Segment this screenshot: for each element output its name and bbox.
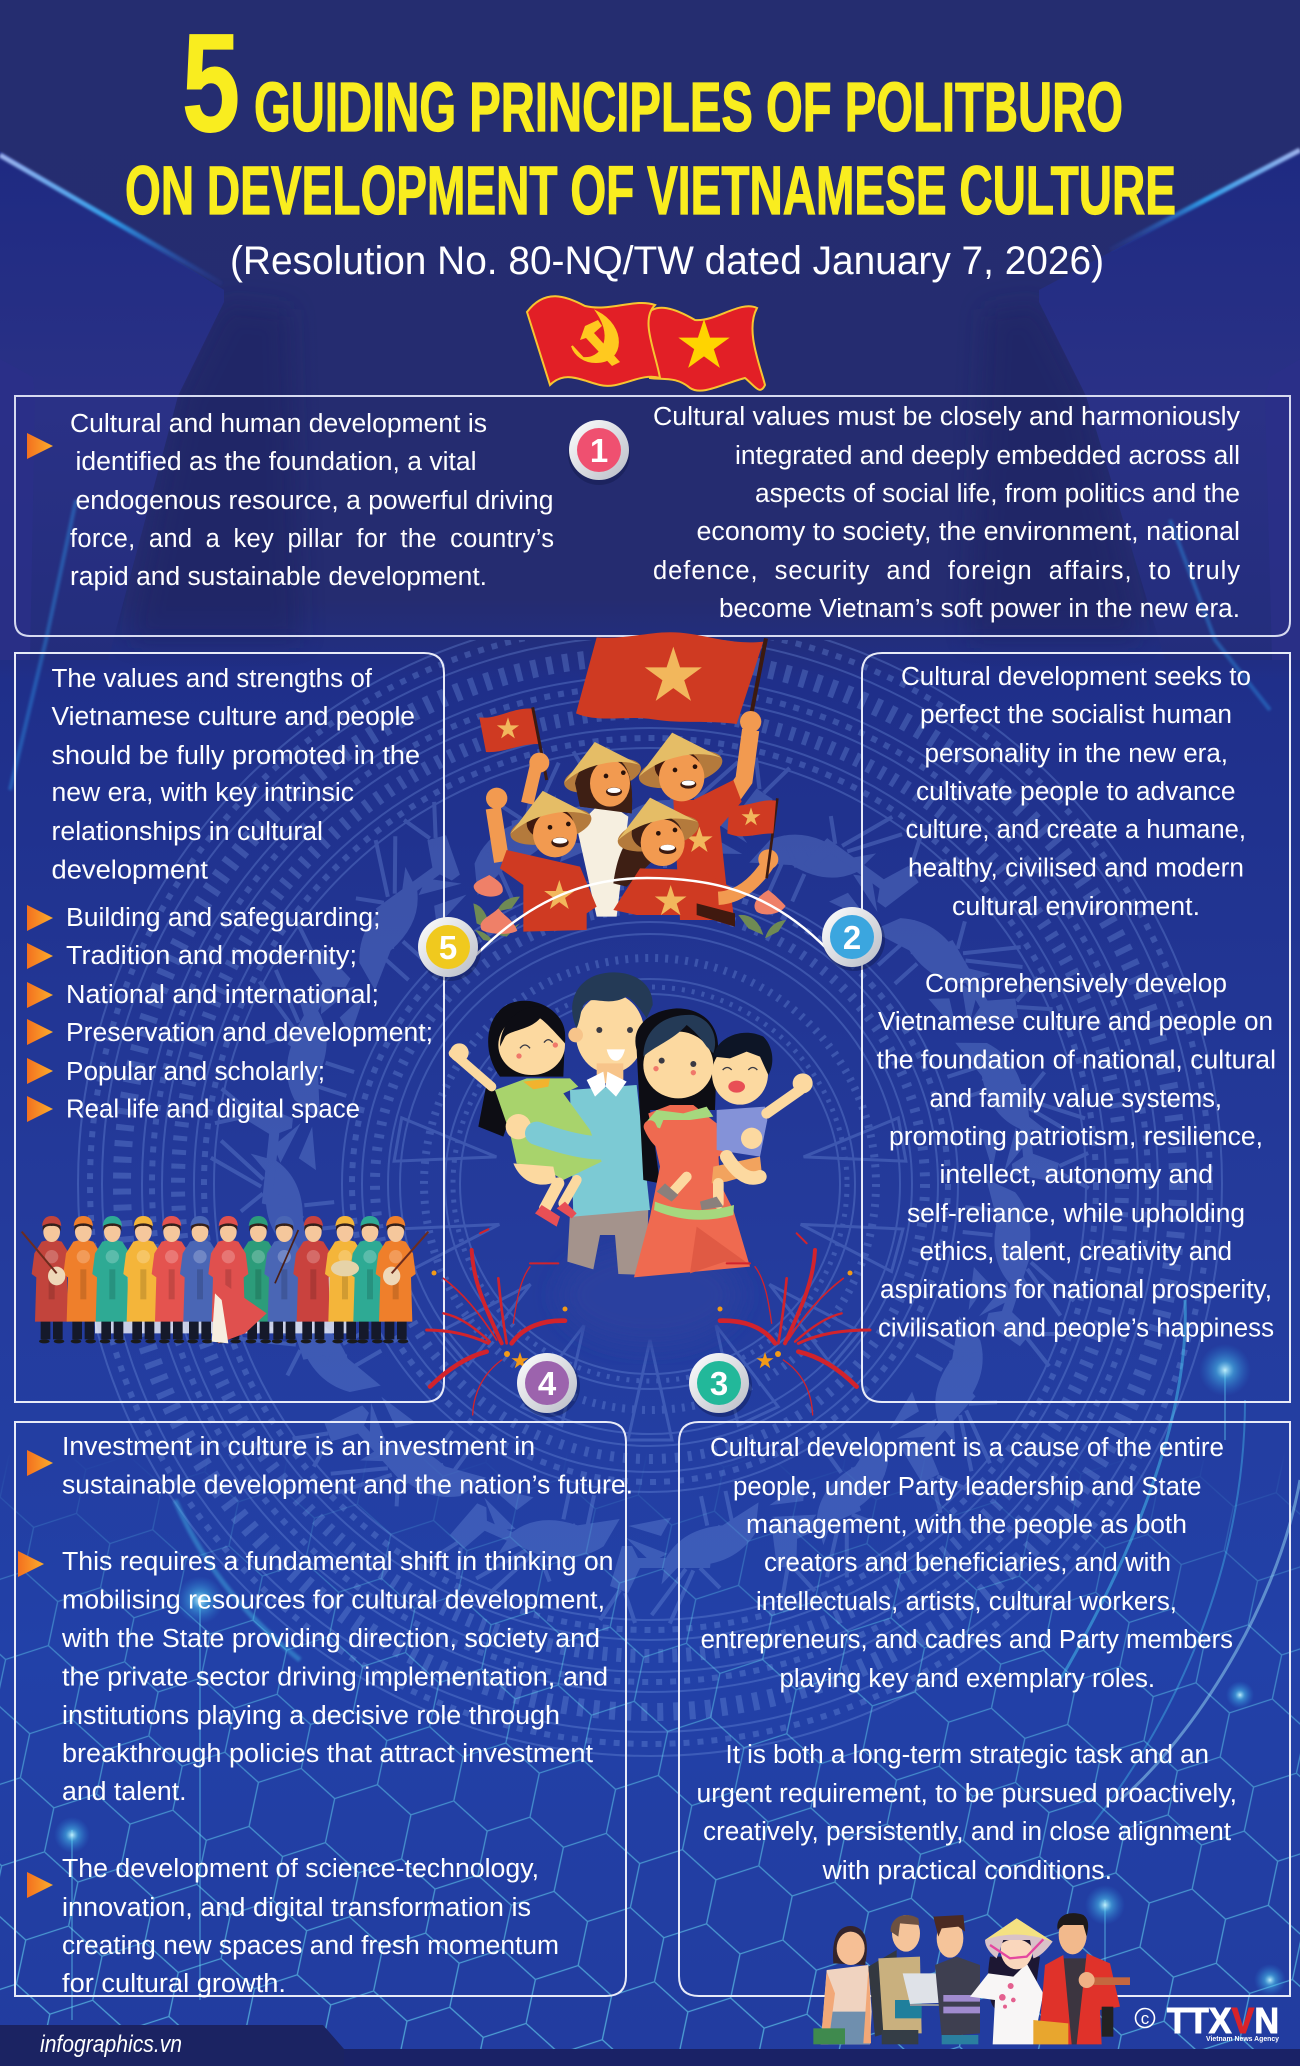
panel: principle 1	[15, 396, 1290, 636]
text: principle 3: playing key and exemplary roles.	[780, 1665, 1155, 1693]
father	[567, 1207, 648, 1275]
list: intrinsic relationships: Popular and scholarly;	[66, 1058, 325, 1086]
illustration: family	[450, 972, 813, 1277]
front left boy	[493, 808, 502, 862]
student 4	[988, 1957, 1040, 2010]
list: intrinsic relationships: Tradition and modernity;	[66, 942, 357, 970]
back right man	[673, 780, 742, 920]
text: principle 3: people, under Party leadership and State	[733, 1473, 1202, 1501]
panel: principle 4	[15, 1422, 626, 1996]
text: principle 4: institutions playing a decisive role through	[62, 1702, 560, 1730]
illustration: fireworks right	[720, 1233, 870, 1415]
text: principle 2: cultivate people to advance	[916, 778, 1236, 806]
footer: website: infographics.vn	[40, 2031, 182, 2058]
text: principle 2: the foundation of national, cultural	[876, 1046, 1276, 1074]
student 5	[1062, 1958, 1097, 2044]
student 3	[935, 1957, 980, 2037]
text: principle 3: entrepreneurs, and cadres and Party members	[701, 1626, 1233, 1654]
badge 3	[689, 1353, 752, 1417]
list: intrinsic relationships: Building and safeguarding;	[66, 904, 380, 932]
subtitle: (Resolution No. 80-NQ/TW dated January 7, 2026)	[230, 239, 1104, 283]
text: principle 5: new era, with key intrinsic	[52, 779, 354, 807]
text: principle 2: cultural environment.	[952, 893, 1200, 921]
text: principle 3: with practical conditions.	[821, 1857, 1112, 1885]
text: principle 1 right	[653, 403, 1240, 623]
text: principle 4: and talent.	[62, 1778, 187, 1806]
text: principle 2: civilisation and people’s happiness	[878, 1314, 1274, 1342]
text: principle 2: intellect, autonomy and	[940, 1161, 1213, 1189]
text: principle 4: with the State providing direction, society and	[61, 1625, 600, 1653]
text: principle 2: aspirations for national prosperity,	[880, 1276, 1272, 1304]
text: principle 4	[18, 1433, 633, 1998]
text: principle 1 left: Cultural and human development is	[70, 410, 487, 438]
badge 1	[568, 420, 630, 485]
father arm	[537, 1133, 638, 1148]
text: principle 4: for cultural growth.	[62, 1970, 286, 1998]
icon: firework sparks	[432, 1270, 852, 1368]
text: principle 1 left: endogenous resource, a powerful driving	[76, 487, 554, 515]
text: principle 1 right: Cultural values must be closely and harmoniously	[653, 403, 1240, 431]
badge 5: 5	[439, 929, 457, 966]
student 1	[833, 1926, 867, 1965]
text: principle 1 right: economy to society, the environment, national	[696, 518, 1240, 546]
text: principle 2: promoting patriotism, resilience,	[889, 1123, 1263, 1151]
text: principle 3: Cultural development is a cause of the entire	[710, 1434, 1224, 1462]
text: principle 1 left: identified as the foundation, a vital	[76, 448, 476, 476]
text: principle 3: urgent requirement, to be pursued proactively,	[696, 1780, 1237, 1808]
text: principle 5: Vietnamese culture and people	[52, 703, 415, 731]
title	[125, 4, 1176, 229]
illustration: fireworks left	[427, 1229, 565, 1415]
logo: TTXVN: c	[1141, 2009, 1150, 2028]
text: principle 4: sustainable development and the nation’s future.	[62, 1472, 633, 1500]
panel: principle 3	[679, 1422, 1290, 1996]
lotus left	[473, 897, 520, 942]
text: principle 1 left: force, and a key pillar for the country’s	[70, 525, 554, 553]
icon: party and national flags	[527, 296, 765, 391]
text: principle 3: It is both a long-term strategic task and an	[726, 1741, 1209, 1769]
boy	[717, 1107, 767, 1157]
lotus right	[738, 915, 786, 938]
text: principle 2: self-reliance, while upholding	[907, 1200, 1245, 1228]
text: principle 2	[876, 663, 1276, 1342]
arc connecting badges 5 and 2	[476, 878, 828, 955]
text: principle 5: The values and strengths of	[52, 665, 373, 693]
text: principle 1 right: aspects of social life, from politics and the	[755, 480, 1240, 508]
footer bar	[0, 2025, 1300, 2066]
logo: TTXVN: Vietnam News Agency	[1206, 2036, 1279, 2043]
text: principle 4: Investment in culture is an investment in	[62, 1433, 535, 1461]
text: principle 2: perfect the socialist human	[920, 701, 1232, 729]
title: 5	[182, 4, 240, 161]
drum pattern	[78, 612, 1222, 1756]
list: intrinsic relationships	[27, 904, 433, 1124]
text: principle 2: culture, and create a humane,	[906, 816, 1246, 844]
badge 4	[517, 1353, 580, 1417]
student 2	[868, 1950, 897, 2037]
text: principle 2: Cultural development seeks to	[901, 663, 1251, 691]
back left woman	[575, 757, 632, 813]
text: principle 1 left: rapid and sustainable development.	[70, 563, 487, 591]
girl	[488, 1001, 565, 1077]
text: principle 4: This requires a fundamental shift in thinking on	[62, 1548, 614, 1576]
panel: principle 2	[862, 653, 1290, 1402]
panel: principle 5	[15, 653, 444, 1402]
text: principle 3: intellectuals, artists, cultural workers,	[756, 1588, 1177, 1616]
text: principle 5: relationships in cultural	[52, 818, 323, 846]
text: principle 3: management, with the people as both	[746, 1511, 1187, 1539]
logo: TTXVN: TTXVN	[1167, 2000, 1279, 2041]
list: intrinsic relationships: Preservation and development;	[66, 1019, 433, 1047]
text: principle 1 left	[27, 410, 554, 591]
text: principle 4: creating new spaces and fresh momentum	[62, 1932, 559, 1960]
list: intrinsic relationships: National and international;	[66, 981, 379, 1009]
badge 2	[822, 907, 885, 971]
text: principle 1 right: integrated and deeply embedded across all	[735, 442, 1240, 470]
front right girl	[613, 827, 653, 887]
list: intrinsic relationships: Real life and digital space	[66, 1096, 360, 1124]
text: principle 3	[696, 1434, 1237, 1885]
badge 5	[418, 917, 481, 981]
text: principle 4: innovation, and digital transformation is	[62, 1894, 531, 1922]
badge 3: 3	[710, 1365, 728, 1402]
text: principle 3: creators and beneficiaries, and with	[764, 1549, 1171, 1577]
text: principle 2: and family value systems,	[930, 1085, 1222, 1113]
text: principle 1 right: become Vietnam’s soft power in the new era.	[719, 595, 1240, 623]
text: principle 2: personality in the new era,	[924, 740, 1228, 768]
text: principle 4: breakthrough policies that attract investment	[62, 1740, 593, 1768]
hex mesh	[0, 1450, 1300, 2050]
text: principle 2: ethics, talent, creativity and	[920, 1238, 1232, 1266]
laptop	[903, 1973, 947, 2004]
text: principle 5	[52, 665, 420, 884]
badge 1: 1	[590, 432, 608, 469]
text: principle 4: mobilising resources for cultural development,	[62, 1587, 605, 1615]
illustration: group of students	[813, 1913, 1130, 2044]
illustration: people in traditional costume	[22, 1216, 428, 1343]
text: principle 2: Vietnamese culture and people on	[878, 1008, 1273, 1036]
badge 2: 2	[843, 919, 861, 956]
text: principle 2: healthy, civilised and modern	[908, 854, 1244, 882]
badge 4: 4	[538, 1365, 557, 1402]
text: principle 3: creatively, persistently, and in close alignment	[703, 1818, 1231, 1846]
mother	[635, 1008, 718, 1183]
text: principle 1 right: defence, security and foreign affairs, to truly	[653, 557, 1240, 585]
text: principle 5: should be fully promoted in the	[52, 742, 420, 770]
text: principle 4: The development of science-technology,	[62, 1855, 539, 1883]
text: principle 2: Comprehensively develop	[925, 970, 1227, 998]
text: principle 5: development	[52, 856, 208, 884]
text: principle 4: the private sector driving implementation, and	[62, 1664, 608, 1692]
illustration: people with flags	[473, 632, 786, 942]
